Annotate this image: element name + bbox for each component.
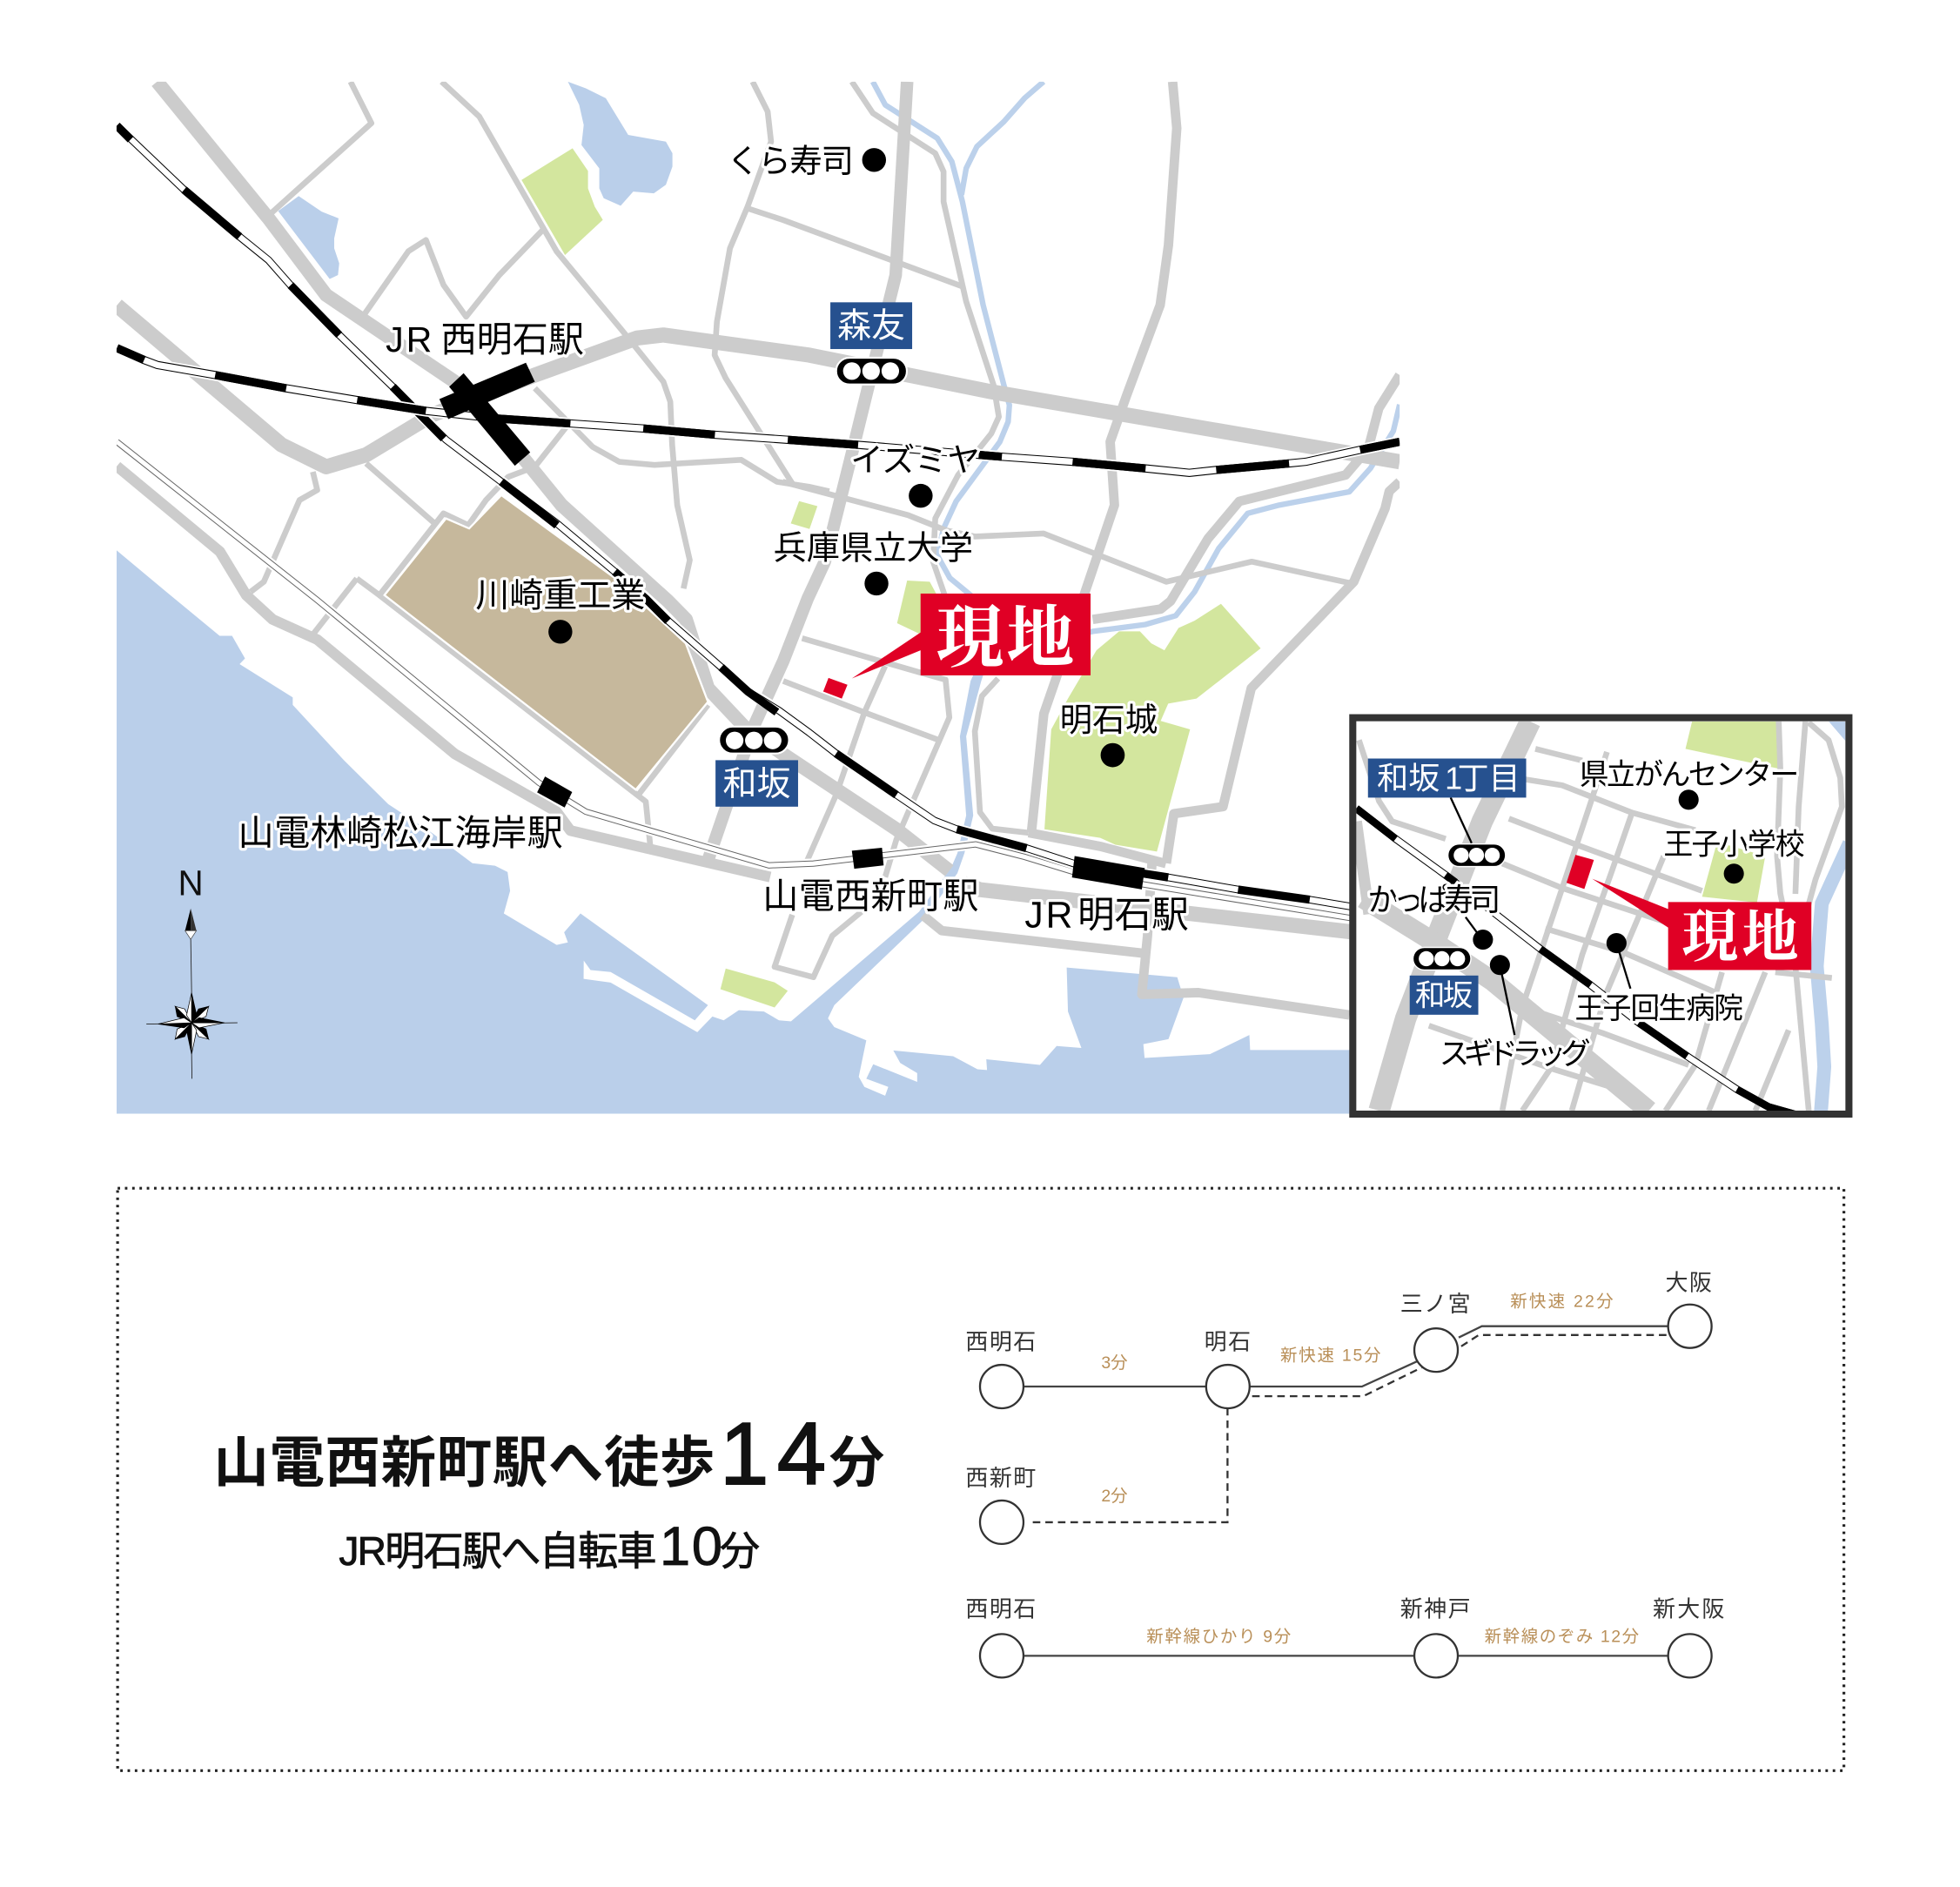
heading: walk to Nishi-Shinmachi station: 4 <box>777 1406 826 1503</box>
railway: JR line <box>117 125 1400 915</box>
station names <box>965 1596 1724 1622</box>
station names: 三ノ宮 <box>1400 1291 1471 1317</box>
label: University of Hyogo: 兵庫県立大学 <box>774 529 973 567</box>
station: Nishi-Shinmachi <box>852 848 883 869</box>
marker: Cancer Center <box>1679 789 1699 809</box>
inset park north <box>1686 722 1781 769</box>
label: Sanyo Nishi-Shinmachi station: 山電西新町駅 <box>762 876 979 917</box>
roads <box>117 82 1400 1015</box>
route diagram: Kobe line <box>965 1270 1712 1544</box>
label: Kawasaki Heavy Industries: 川崎重工業 <box>475 577 645 614</box>
label: Kura Sushi: くら寿司 <box>727 143 854 179</box>
subheading: bicycle to JR Akashi station: JR明石駅へ自転車 <box>339 1528 657 1574</box>
pond: west <box>279 196 339 279</box>
label: Sugi Drug: スギドラッグ <box>1440 1038 1591 1071</box>
signal label: Moritomo: 森友 <box>837 308 905 346</box>
marker: Kawasaki <box>548 620 573 644</box>
inset railway <box>1356 809 1796 1114</box>
label: Oji Elementary School: 王子小学校 <box>1663 829 1805 862</box>
station names <box>965 1270 1712 1491</box>
compass rose <box>146 909 238 1078</box>
rivers <box>782 82 1400 1033</box>
signal label: Wasaka 1-chome: 和坂 <box>1377 761 1440 796</box>
station names: 明石 <box>1205 1328 1251 1354</box>
signal icon: Wasaka <box>719 727 789 754</box>
sea <box>117 550 1400 1114</box>
inset map content <box>1356 722 1849 1117</box>
factory site <box>385 495 708 789</box>
signal icon: Moritomo <box>836 358 907 385</box>
travel times: 新幹線のぞみ 12分 <box>1485 1627 1640 1646</box>
label: Kappa Sushi: かっぱ寿司 <box>1367 882 1500 917</box>
site callout: 現地 <box>936 601 1074 675</box>
inset frame <box>1353 718 1849 1114</box>
travel times: 2分 <box>1101 1487 1128 1506</box>
site marker <box>823 678 848 699</box>
signal label: Wasaka 1-chome <box>1368 759 1527 797</box>
signal label: Wasaka 1-chome: 1 <box>1445 761 1462 796</box>
subheading: bicycle to JR Akashi station: 10 <box>660 1516 722 1577</box>
travel times <box>1146 1627 1640 1646</box>
heading: walk to Nishi-Shinmachi station: 1 <box>720 1406 769 1503</box>
heading: walk to Nishi-Shinmachi station: 分 <box>829 1434 884 1494</box>
signal label: Moritomo <box>830 302 912 349</box>
site callout: 現地 <box>1681 907 1798 970</box>
signal label: Wasaka 1-chome: 丁目 <box>1458 761 1520 796</box>
compass: north label: N <box>178 863 204 903</box>
signal icon: Wasaka 1-chome <box>1448 844 1506 867</box>
parks <box>521 148 1260 1007</box>
station names: 西新町 <box>965 1465 1036 1491</box>
travel times: 新快速 15分 <box>1280 1346 1381 1365</box>
label marker: Kura Sushi <box>863 148 886 171</box>
travel times <box>1101 1292 1614 1506</box>
travel times: 新幹線ひかり 9分 <box>1146 1627 1292 1646</box>
heading: walk to Nishi-Shinmachi station: 山電西新町駅へ徒歩 <box>213 1434 715 1494</box>
marker: University of Hyogo <box>864 572 889 595</box>
station: JR Akashi <box>1072 856 1144 890</box>
label: Izumiya: イズミヤ <box>850 441 980 478</box>
station names: 西明石 <box>965 1328 1036 1354</box>
site marker <box>1567 855 1594 889</box>
label: Sanyo Hayashisaki-Matsuekaigan station: 山電林崎松江海岸駅 <box>238 813 563 853</box>
label: Oji Kaisei Hospital: 王子回生病院 <box>1575 992 1743 1025</box>
route lines <box>1023 1326 1668 1522</box>
station names: 新大阪 <box>1653 1596 1724 1622</box>
heading: walk to Nishi-Shinmachi station <box>213 1406 884 1503</box>
inset park south <box>1702 842 1765 903</box>
marker: Akashi Castle <box>1101 743 1124 767</box>
railway: JR east-west line <box>117 348 1400 473</box>
marker: Kappa Sushi <box>1473 930 1493 950</box>
station circles <box>980 1634 1712 1677</box>
site callout <box>852 594 1091 679</box>
signal label: Wasaka: 和坂 <box>722 766 790 803</box>
inset water <box>1816 722 1849 1117</box>
station names: 西明石 <box>965 1596 1036 1622</box>
subheading: bicycle to JR Akashi station: 分 <box>720 1528 760 1574</box>
signal label: Wasaka <box>715 760 798 807</box>
label: Prefectural Cancer Center: 県立がんセンター <box>1580 759 1799 792</box>
route diagram: Shinkansen <box>965 1596 1724 1677</box>
label: Akashi Castle: 明石城 <box>1060 702 1158 738</box>
marker: Oji Kaisei Hospital <box>1607 933 1627 953</box>
signal icon: Wasaka <box>1413 947 1471 970</box>
travel times: 3分 <box>1101 1353 1128 1373</box>
station names: 新神戸 <box>1400 1596 1471 1622</box>
pond: north lake <box>568 82 673 205</box>
label: JR Akashi station: JR明石駅 <box>1024 894 1189 936</box>
station names: 大阪 <box>1665 1270 1712 1296</box>
panel: inset map <box>1353 717 1849 1117</box>
travel times: 新快速 22分 <box>1510 1292 1614 1311</box>
site callout <box>1592 879 1811 970</box>
marker: Izumiya <box>909 484 933 507</box>
panel: access box <box>117 1188 1844 1770</box>
station: Hayashisaki-Matsuekaigan <box>537 776 572 808</box>
subheading: bicycle to JR Akashi station <box>339 1516 760 1577</box>
station: JR Nishi-Akashi <box>440 363 535 466</box>
marker: Oji Elementary School <box>1724 863 1744 883</box>
leader lines <box>1451 797 1630 1035</box>
marker: Sugi Drug <box>1490 955 1510 975</box>
inset roads <box>1356 722 1842 1111</box>
signal label: Wasaka: 和坂 <box>1415 980 1473 1013</box>
panel: main area map <box>117 82 1400 1114</box>
station circles <box>980 1305 1712 1544</box>
label: JR Nishi-Akashi station: JR 西明石駅 <box>386 319 584 359</box>
route line <box>1023 1655 1668 1656</box>
railway: Sanyo line <box>117 442 1400 926</box>
